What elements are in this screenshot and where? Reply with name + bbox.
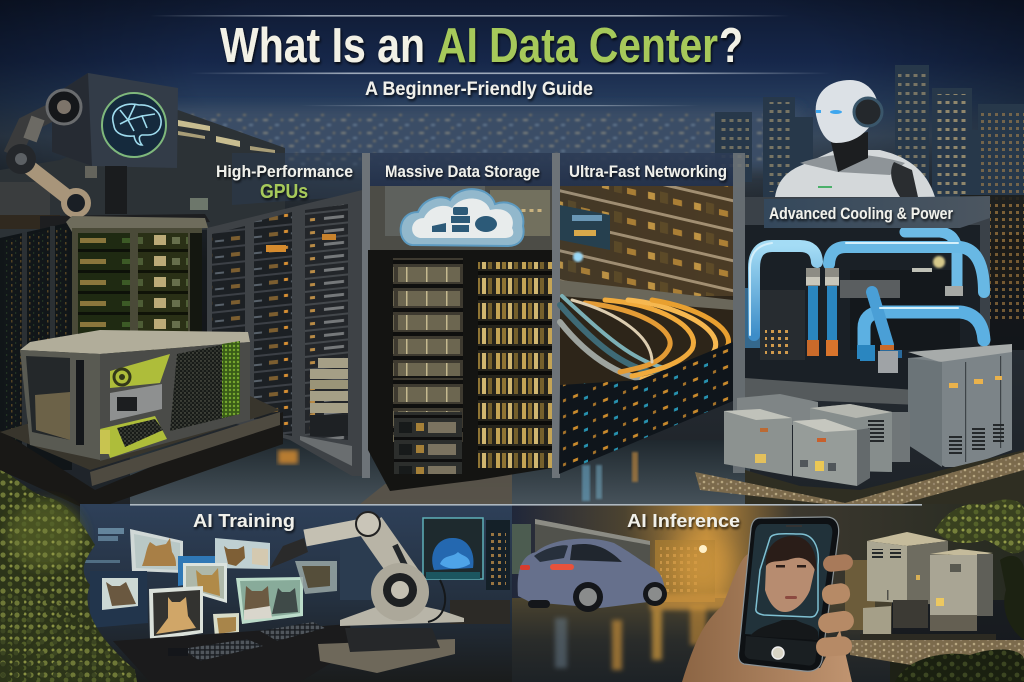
GPU server unit (0, 330, 283, 511)
car (518, 539, 667, 612)
power shelf (745, 378, 920, 405)
reflective floor (130, 440, 750, 504)
right grass ground (745, 450, 1024, 504)
network upper shelves (560, 186, 733, 386)
tree foliage left (0, 470, 137, 682)
robot android (775, 80, 935, 197)
label: Massive Data Storage: Massive Data Storage (385, 163, 540, 181)
label: Ultra-Fast Networking: Ultra-Fast Networking (569, 163, 727, 181)
fingers gripping phone (815, 553, 855, 657)
panel: massive data storage (362, 153, 552, 491)
rack wall left (0, 222, 72, 470)
background server glow (80, 520, 510, 624)
green lit cabinet (66, 216, 208, 353)
background building left (0, 110, 285, 240)
tree foliage right (895, 500, 1024, 682)
cooling pipes (750, 232, 984, 345)
cooling equipment backdrop (745, 197, 990, 397)
title: AI Data Center (437, 19, 718, 73)
label: Advanced Cooling & Power (764, 196, 990, 228)
icon: cloud with database stacks (401, 189, 524, 246)
GPU vent mesh (170, 341, 240, 431)
road reflections (555, 594, 740, 670)
night city skyline (160, 65, 1024, 320)
title: ? (719, 19, 743, 73)
hand holding phone (682, 554, 852, 682)
platform (0, 396, 283, 511)
label: High-Performance GPUs (216, 153, 362, 205)
panel: high-performance GPUs (0, 153, 362, 476)
label: Advanced Cooling & Power: Advanced Cooling & Power (769, 205, 953, 223)
title rules (150, 15, 830, 106)
smartphone with face scan (739, 517, 839, 671)
panel: AI training (80, 504, 512, 682)
robot arm with brain display (6, 73, 210, 232)
storage racks (368, 250, 552, 491)
subtitle: A Beginner-Friendly Guide (365, 79, 593, 100)
gravel pad (850, 640, 1024, 668)
utility boxes (845, 532, 996, 640)
gravel base (695, 452, 1024, 510)
amber lit buildings (512, 519, 733, 602)
panel: ultra-fast networking (552, 153, 745, 478)
network cable bundle (560, 296, 729, 382)
robot arm joints (6, 90, 91, 218)
panel: advanced cooling and power (695, 196, 1024, 510)
storage building top (370, 186, 552, 254)
icon: brain display housing (40, 73, 210, 232)
title (220, 19, 743, 73)
title: What Is an (220, 19, 425, 73)
robotic arm (270, 512, 464, 673)
label: Massive Data Storage (370, 153, 552, 186)
label: High-Performance GPUs: High-Performance (216, 162, 353, 181)
label: AI Training: AI Training (193, 510, 295, 531)
label: High-Performance GPUs: GPUs (260, 181, 308, 203)
generator units (724, 394, 910, 486)
GPU green panels (100, 354, 170, 458)
GPU chassis (20, 330, 250, 461)
label: AI Inference: AI Inference (627, 510, 740, 531)
network lower racks (559, 342, 733, 474)
panel: AI inference (512, 500, 1024, 682)
label: Ultra-Fast Networking (560, 153, 733, 186)
desk and keyboards (113, 622, 352, 682)
coolant cylinders (806, 268, 963, 373)
server racks perspective (207, 190, 362, 476)
power cabinets (908, 344, 1012, 467)
globe cloud screen (423, 518, 483, 579)
cat photo screens (90, 529, 337, 641)
